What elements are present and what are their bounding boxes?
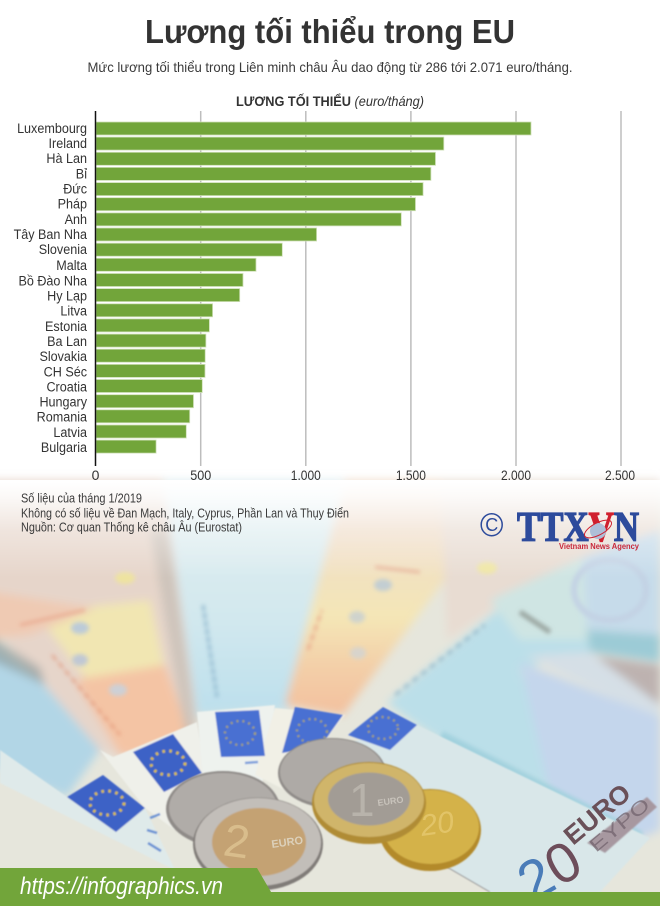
country labels: CH Séc (44, 364, 87, 379)
note ends and EU flags (0, 705, 657, 892)
icon: copyright (481, 514, 502, 536)
country labels: Bulgaria (41, 439, 88, 455)
axis labels: 0 (92, 467, 100, 483)
coin and note lettering: EURO (558, 777, 637, 851)
country labels: Hungary (39, 394, 87, 410)
coin: silver back right (278, 738, 386, 808)
country labels: Latvia (53, 424, 88, 440)
coin: 1 euro (312, 762, 426, 844)
coin and note lettering (221, 774, 654, 906)
coin and note lettering: 2 (221, 813, 253, 868)
country labels: Ba Lan (47, 333, 87, 349)
axis labels: 2.500 (605, 467, 635, 483)
logo: TTXVN: Vietnam News Agency (559, 542, 640, 551)
source notes (21, 492, 349, 534)
coin: 20 cent (379, 789, 481, 871)
footer bar (0, 868, 660, 906)
chart heading: LƯƠNG TỐI THIỂU (euro/tháng) (236, 92, 424, 109)
country labels: Hà Lan (46, 151, 87, 166)
country labels: Slovakia (39, 348, 88, 364)
country labels: Anh (65, 211, 87, 227)
source notes: Không có số liệu về Đan Mạch, Italy, Cyprus, Phần Lan và Thụy Điển (21, 506, 349, 520)
axis labels: 1.500 (396, 467, 426, 483)
country labels: Pháp (58, 196, 87, 212)
source notes: Số liệu của tháng 1/2019 (21, 492, 142, 506)
axis labels (92, 467, 635, 483)
country labels: Đức (63, 181, 87, 197)
country labels: Ireland (49, 135, 87, 151)
country labels: Tây Ban Nha (14, 226, 88, 242)
coin and note lettering: 20 (417, 806, 456, 843)
blurred banknotes (0, 480, 660, 838)
axis labels: 500 (190, 467, 211, 483)
blurred printed details on notes (20, 560, 646, 838)
white fade (0, 480, 660, 580)
subtitle: Mức lương tối thiểu trong Liên minh châu Âu dao động từ 286 tới 2.071 euro/tháng. (88, 59, 572, 75)
coin: silver back left (166, 771, 280, 847)
country labels: Hy Lạp (47, 288, 87, 304)
country labels: Bỉ (76, 166, 87, 181)
source notes: Nguồn: Cơ quan Thống kê châu Âu (Eurostat) (21, 520, 242, 534)
coin and note lettering: EURO (377, 794, 404, 808)
coin and note lettering: 1 (349, 774, 375, 826)
bars (96, 122, 531, 453)
country labels: Luxembourg (17, 120, 87, 136)
country labels: Litva (60, 303, 88, 319)
country labels: Malta (56, 258, 88, 273)
logo: TTXVN: TTXVN (517, 505, 639, 551)
coin: 2 euro (193, 798, 323, 890)
background photo: euro notes and coins (0, 480, 660, 906)
icon: copyright: C (485, 515, 498, 535)
bar chart: minimum wage by country (14, 111, 635, 483)
country labels (14, 120, 88, 455)
axis labels: 1.000 (291, 467, 321, 483)
title: Lương tối thiểu trong EU (145, 13, 515, 50)
country labels: Romania (37, 409, 88, 425)
coin and note lettering: EYPO (586, 794, 654, 857)
footer url: https://infographics.vn (20, 873, 223, 900)
country labels: Croatia (46, 379, 88, 395)
country labels: Slovenia (39, 241, 88, 257)
country labels: Estonia (45, 318, 88, 334)
country labels: Bồ Đào Nha (18, 273, 88, 289)
axis labels: 2.000 (501, 467, 531, 483)
coin and note lettering: EURO (271, 835, 304, 851)
